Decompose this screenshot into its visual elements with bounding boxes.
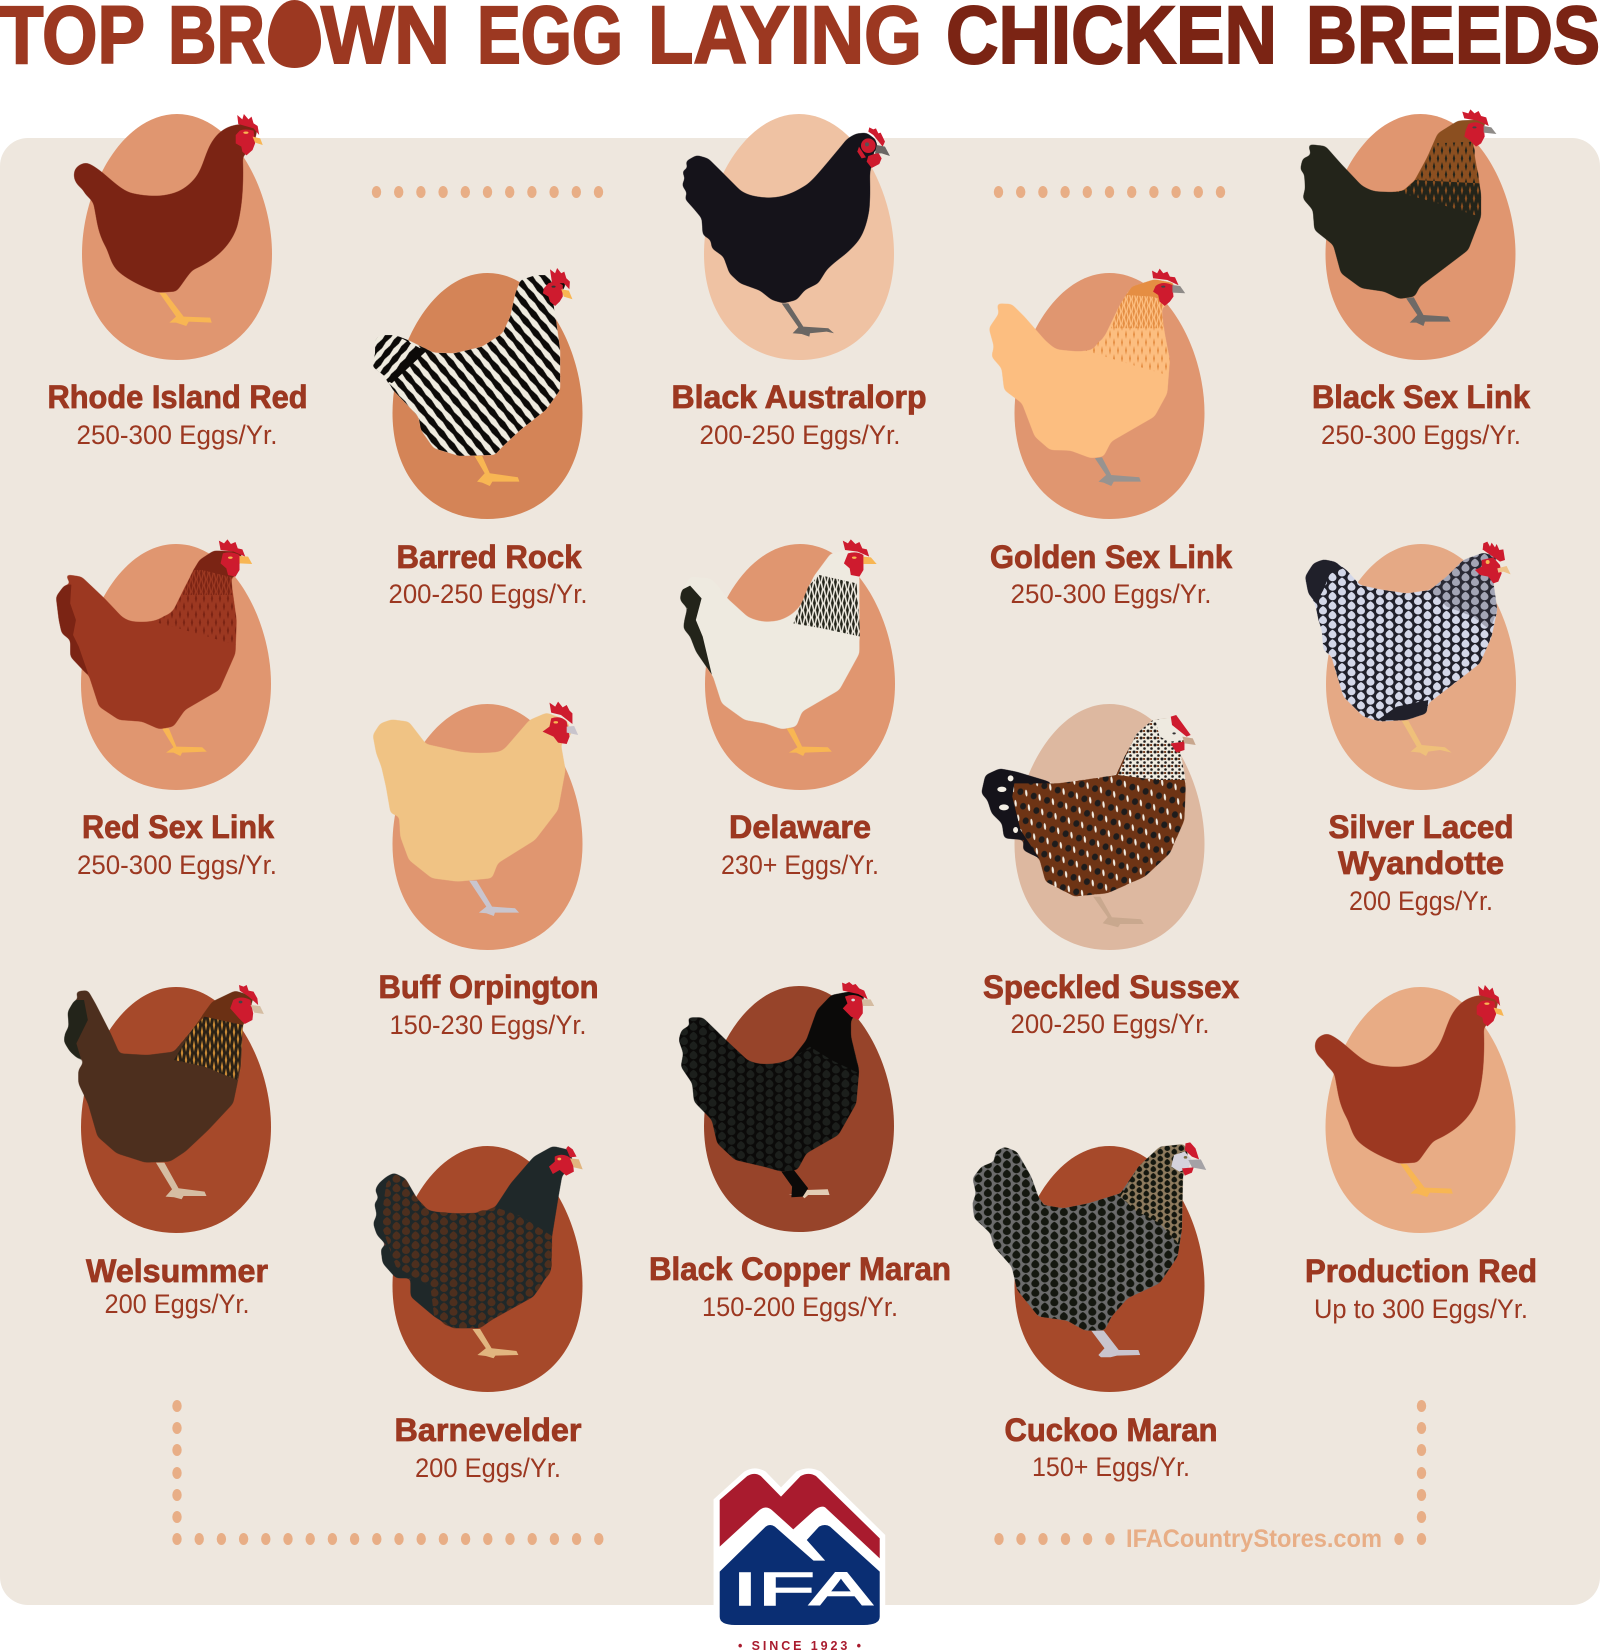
breed: Black Copper Maran: [649, 982, 951, 1322]
breed: Black Australorp: [672, 114, 926, 450]
logo: IFA: [714, 1468, 885, 1651]
egg count: Up to 300 Eggs/Yr.: [1314, 1294, 1528, 1324]
egg: [705, 544, 895, 790]
breed: Cuckoo Maran: [972, 1142, 1218, 1482]
breed: Golden Sex Link: [989, 269, 1232, 609]
egg: [392, 1146, 582, 1392]
egg count: 250-300 Eggs/Yr.: [76, 420, 278, 450]
name: Red Sex Link: [82, 809, 274, 845]
name: Rhode Island Red: [48, 379, 308, 415]
breed: Silver Laced Wyandotte: [1305, 542, 1516, 916]
chicken: [1305, 542, 1511, 756]
egg: [82, 114, 272, 360]
egg count: 200 Eggs/Yr.: [104, 1289, 250, 1319]
egg count: 200-250 Eggs/Yr.: [1010, 1009, 1210, 1039]
breed: Rhode Island Red: [48, 114, 308, 450]
egg count: 250-300 Eggs/Yr.: [77, 850, 277, 880]
name: Production Red: [1305, 1253, 1537, 1289]
logo letters: IFA: [732, 1563, 873, 1615]
egg: [704, 114, 894, 360]
egg: [1326, 987, 1516, 1233]
breed: Barred Rock: [372, 268, 588, 609]
chicken: [680, 539, 877, 756]
egg count: 200-250 Eggs/Yr.: [388, 579, 588, 609]
egg count: 150-200 Eggs/Yr.: [702, 1292, 898, 1322]
name: Golden Sex Link: [990, 539, 1232, 575]
egg count: 230+ Eggs/Yr.: [721, 850, 879, 880]
egg: [392, 273, 582, 519]
egg: [1014, 273, 1204, 519]
title: [0, 0, 1600, 81]
egg: [1014, 1146, 1204, 1392]
breed: Production Red: [1305, 985, 1537, 1324]
chicken: [989, 269, 1185, 486]
egg count: 150+ Eggs/Yr.: [1032, 1452, 1190, 1482]
egg: [81, 987, 271, 1233]
egg: [704, 986, 894, 1232]
egg: [81, 544, 271, 790]
name: Cuckoo Maran: [1004, 1412, 1218, 1448]
breed: Black Sex Link: [1300, 109, 1530, 450]
breed: Barnevelder: [373, 1146, 583, 1483]
egg: [392, 704, 582, 950]
name: Black Copper Maran: [649, 1251, 951, 1287]
breed: Delaware: [680, 539, 895, 880]
egg count: 150-230 Eggs/Yr.: [390, 1010, 586, 1040]
chicken: [373, 1146, 583, 1358]
chicken: [1315, 985, 1504, 1197]
breed: Red Sex Link: [56, 539, 277, 880]
chicken: [1300, 109, 1496, 326]
egg count: 200 Eggs/Yr.: [1349, 886, 1493, 916]
name: Speckled Sussex: [983, 969, 1239, 1005]
chicken: [372, 268, 572, 486]
chicken: [972, 1142, 1206, 1357]
chicken: [56, 539, 252, 756]
name: Delaware: [729, 809, 871, 845]
egg count: 250-300 Eggs/Yr.: [1010, 579, 1212, 609]
name: Black Sex Link: [1312, 379, 1530, 415]
name: Silver Laced: [1328, 809, 1514, 845]
chicken: [682, 127, 890, 337]
chicken: [981, 715, 1196, 927]
breed: Buff Orpington: [373, 702, 598, 1040]
egg count: 250-300 Eggs/Yr.: [1321, 420, 1521, 450]
name line two: Wyandotte: [1338, 845, 1504, 881]
breed: Welsummer: [64, 985, 271, 1319]
egg count: 200-250 Eggs/Yr.: [700, 420, 900, 450]
chicken: [373, 702, 578, 916]
egg: [1014, 704, 1204, 950]
breed: Speckled Sussex: [981, 704, 1239, 1039]
website URL: IFACountryStores.com: [1126, 1525, 1382, 1553]
egg: [1326, 114, 1516, 360]
egg count: 200 Eggs/Yr.: [415, 1453, 561, 1483]
dotted border decoration: [172, 186, 1426, 1545]
chicken: [74, 114, 263, 326]
name: Welsummer: [86, 1253, 268, 1289]
egg: [1326, 544, 1516, 790]
logo mountains: [714, 1468, 885, 1628]
chicken: [64, 985, 264, 1199]
name: Barred Rock: [396, 539, 582, 575]
name: Black Australorp: [672, 379, 926, 415]
name: Buff Orpington: [378, 969, 598, 1005]
chicken: [679, 982, 874, 1198]
name: Barnevelder: [394, 1412, 582, 1448]
